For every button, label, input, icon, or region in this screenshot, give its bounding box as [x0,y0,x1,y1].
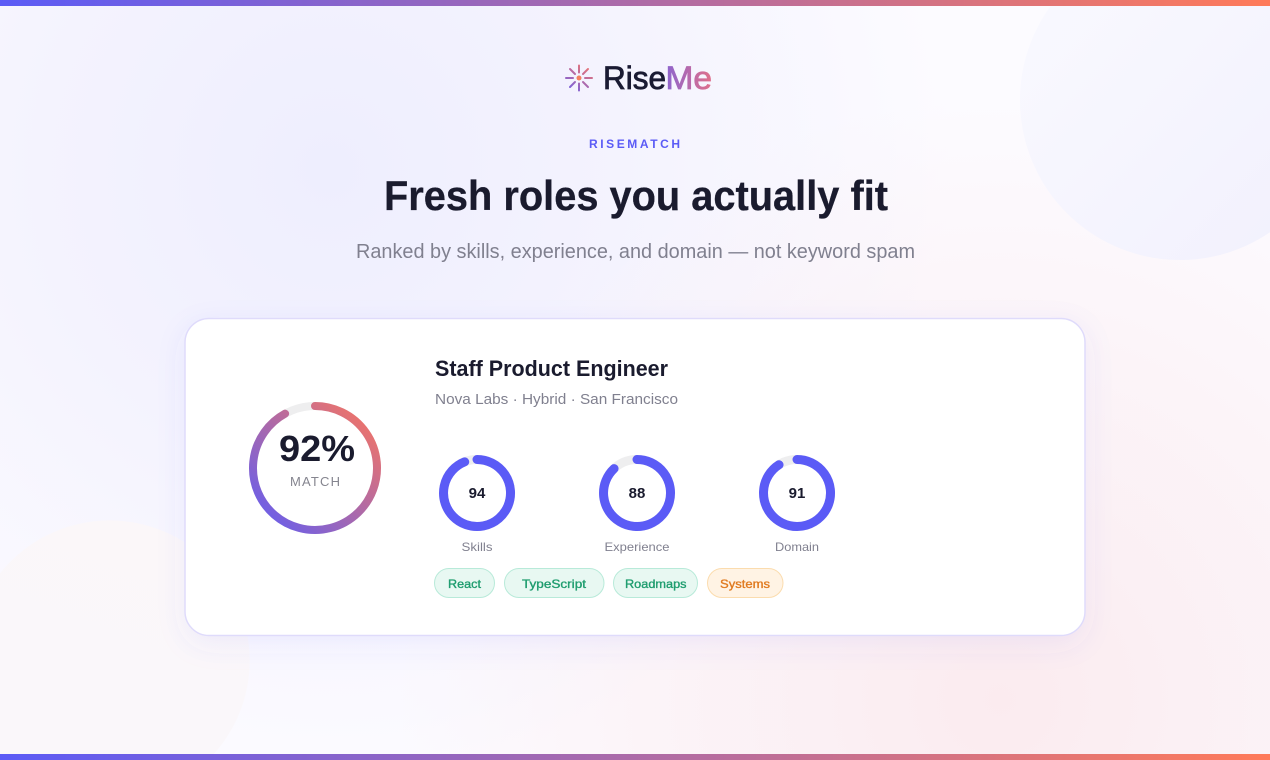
logo wordmark: Rise [603,60,666,96]
tag: TypeScript: TypeScript [522,577,587,591]
domain score ring: 91 [789,485,805,502]
tag: Roadmaps [614,568,698,598]
logo wordmark: Me [666,60,712,96]
icon: spark [566,66,592,90]
experience score ring: 88 [629,485,645,502]
panel: job match card [185,318,1085,636]
tag: TypeScript [504,568,604,598]
tag: React [434,568,494,598]
title: Fresh roles you actually fit [384,172,888,219]
skills score ring [444,459,511,554]
tag: Roadmaps: Roadmaps [625,577,686,591]
match percentage: 92% [279,428,355,469]
tag: Systems [708,568,783,598]
match label: MATCH [290,474,340,489]
overall match ring [253,406,377,530]
job title: Staff Product Engineer [435,356,668,381]
experience score ring [604,460,671,554]
eyebrow label: RISEMATCH [589,137,680,151]
tag: Systems: Systems [720,577,770,591]
skills score ring: Skills [462,540,492,554]
decorative circle top right [1020,0,1270,260]
skills score ring: 94 [469,485,486,502]
domain score ring [764,460,831,554]
bottom gradient bar [0,754,1270,760]
tag: React: React [448,577,482,591]
logo [566,60,712,96]
subtitle: Ranked by skills, experience, and domain — not keyword spam [356,241,915,263]
decorative circle bottom left [0,520,250,754]
domain score ring: Domain [775,540,819,554]
top gradient bar [0,0,1270,6]
job meta: Nova Labs · Hybrid · San Francisco [435,392,678,408]
experience score ring: Experience [604,540,670,554]
card surface [185,318,1085,636]
